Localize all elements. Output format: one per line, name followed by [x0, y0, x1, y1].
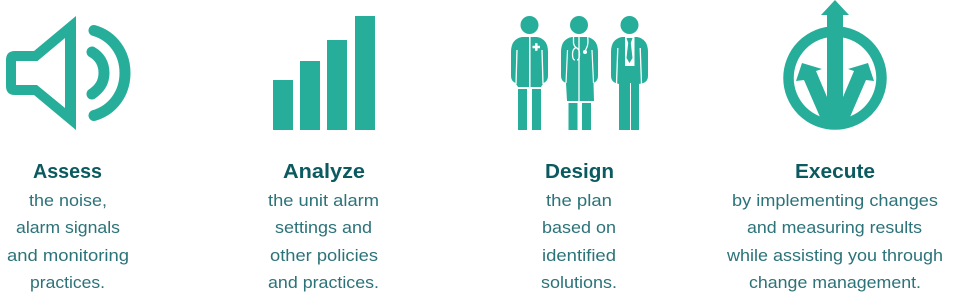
text: assess description: alarm signals — [16, 218, 120, 237]
text: execute description: while assisting you through — [726, 246, 943, 265]
text: assess description: the noise, — [29, 191, 107, 210]
text: analyze description — [268, 191, 379, 292]
icon: rising bar chart — [273, 16, 375, 130]
text: design description — [541, 191, 617, 292]
text: design description: the plan — [546, 191, 612, 210]
text: assess description — [7, 191, 129, 292]
text: design description: identified — [542, 246, 616, 265]
text: execute description: change management. — [749, 273, 921, 292]
heading: assess: Assess — [33, 160, 102, 183]
column: execute text — [726, 160, 943, 292]
text: analyze description: and practices. — [268, 273, 379, 292]
text: execute description: and measuring results — [747, 218, 922, 237]
icon: speaker with sound waves — [6, 16, 125, 130]
heading: design: Design — [545, 160, 614, 183]
column: assess text — [7, 160, 129, 292]
text: analyze description: other policies — [270, 246, 378, 265]
text: assess description: and monitoring — [7, 246, 129, 265]
text: assess description: practices. — [30, 273, 105, 292]
text: execute description: by implementing changes — [732, 191, 938, 210]
figure: nurse — [511, 16, 548, 130]
heading: analyze: Analyze — [283, 160, 365, 183]
figure: doctor with stethoscope — [561, 16, 598, 130]
text: design description: solutions. — [541, 273, 617, 292]
column: design text — [541, 160, 617, 292]
text: analyze description: settings and — [275, 218, 372, 237]
icon: arrows rising through a circle — [788, 0, 882, 124]
heading: execute: Execute — [795, 160, 875, 183]
text: execute description — [726, 191, 943, 292]
figure: manager with tie — [611, 16, 648, 130]
column: analyze text — [268, 160, 379, 292]
text: design description: based on — [542, 218, 616, 237]
text: analyze description: the unit alarm — [268, 191, 379, 210]
icon: three healthcare staff — [511, 16, 648, 130]
